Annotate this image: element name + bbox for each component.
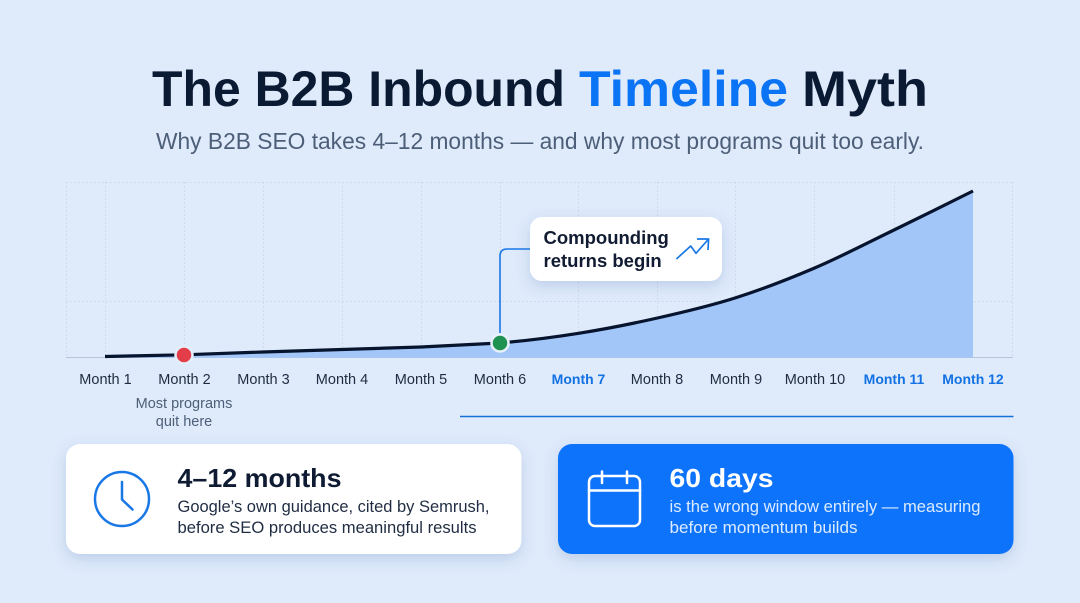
- title: [152, 61, 928, 117]
- marker: month 2: [176, 346, 192, 364]
- quit annotation: Most programs: [136, 396, 232, 412]
- text: wrong window: before momentum builds: [670, 519, 858, 537]
- text: Google guidance: Google’s own guidance, cited by Semrush,: [178, 498, 490, 516]
- chart: [66, 182, 1014, 430]
- month labels: Month 7: [552, 371, 606, 387]
- month labels: [79, 371, 1004, 388]
- title: Timeline: [579, 61, 788, 117]
- month labels: Month 3: [237, 372, 290, 388]
- marker: month 6: [492, 334, 508, 352]
- title: Myth: [802, 61, 928, 117]
- baseline: [66, 356, 1013, 358]
- month labels: Month 5: [395, 372, 447, 388]
- icon: clock: [95, 472, 149, 526]
- connector line: [500, 249, 530, 333]
- month labels: Month 9: [710, 372, 762, 388]
- callout: Compounding: [544, 227, 669, 248]
- momentum line: [460, 416, 1014, 418]
- callout: [530, 217, 722, 281]
- month labels: Month 8: [631, 372, 683, 388]
- icon: trend arrow: [676, 239, 709, 259]
- month labels: Month 6: [474, 372, 526, 388]
- title: The B2B Inbound: [152, 61, 565, 117]
- quit annotation: quit here: [156, 414, 212, 430]
- month labels: Month 1: [79, 372, 132, 388]
- heading: 4–12 months: 4–12 months: [178, 463, 342, 493]
- month labels: Month 12: [942, 371, 1004, 387]
- month labels: Month 11: [864, 371, 925, 387]
- panel: 4–12 months: [66, 444, 522, 554]
- month labels: Month 2: [158, 372, 211, 388]
- panel: 60 days: [558, 444, 1014, 554]
- area under curve: [105, 191, 973, 358]
- month labels: Month 4: [316, 372, 368, 388]
- heading: 60 days: 60 days: [670, 463, 774, 493]
- text: Google guidance: before SEO produces meaningful results: [178, 519, 477, 537]
- text: wrong window: is the wrong window entirely — measuring: [670, 498, 980, 516]
- subtitle: Why B2B SEO takes 4–12 months — and why most programs quit too early.: [156, 128, 924, 154]
- callout: returns begin: [544, 250, 662, 271]
- month labels: Month 10: [785, 372, 845, 388]
- icon: calendar: [589, 472, 640, 526]
- growth curve: [105, 191, 973, 356]
